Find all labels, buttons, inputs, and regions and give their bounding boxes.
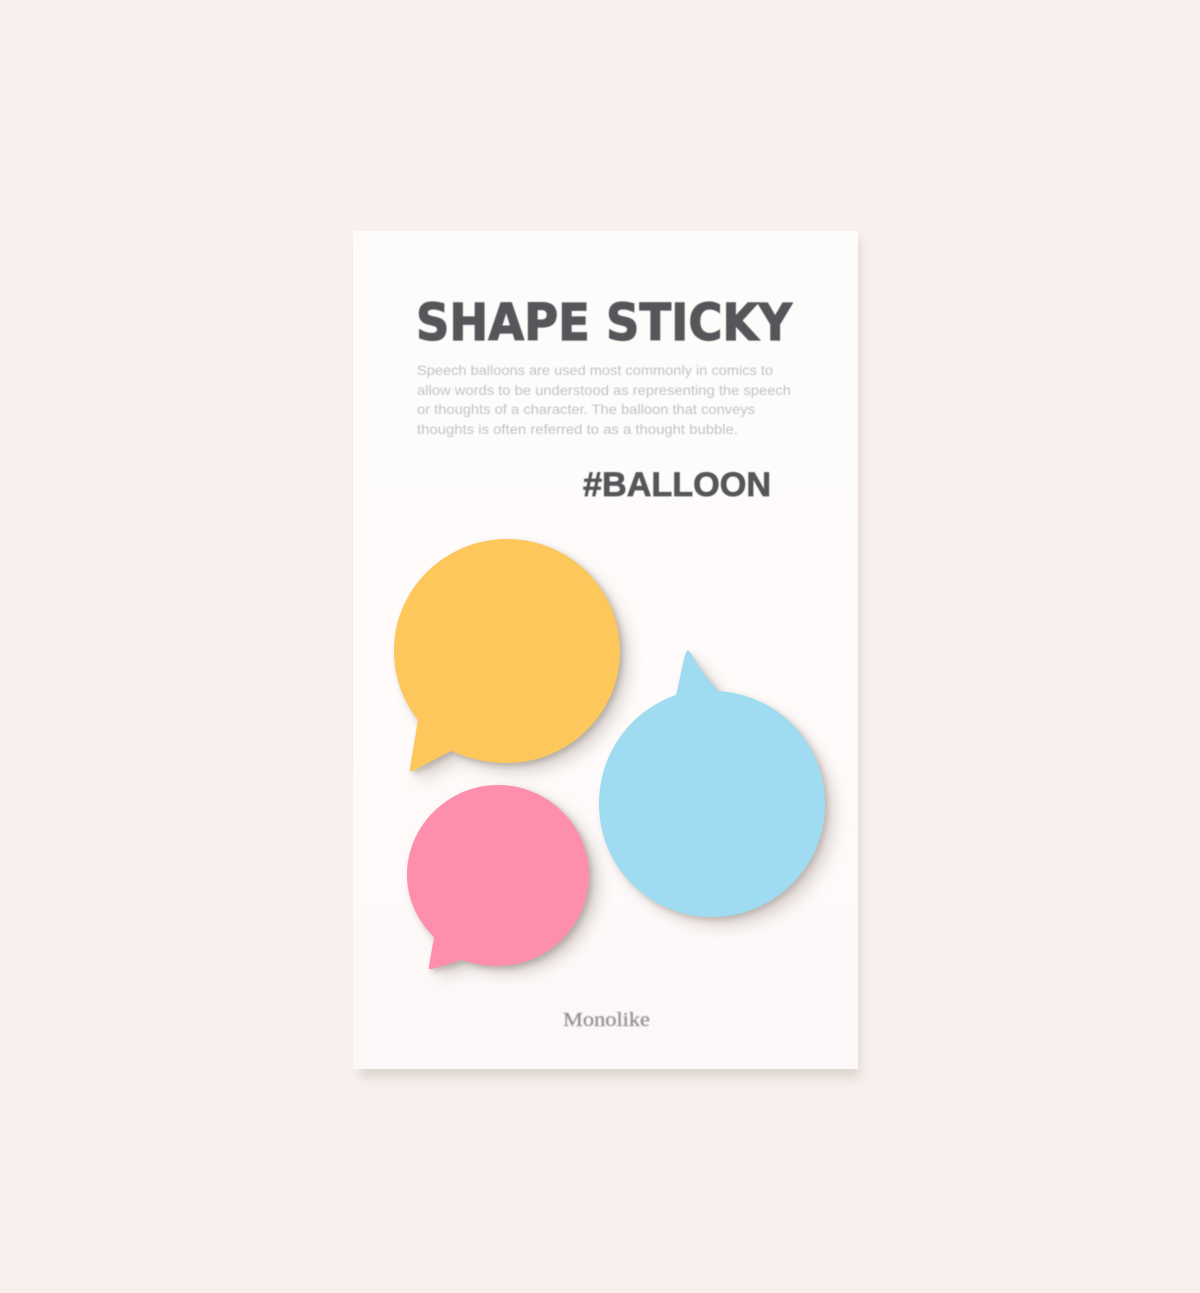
description text: allow words to be understood as representing the speech bbox=[417, 382, 791, 398]
description text: Speech balloons are used most commonly in comics to bbox=[417, 362, 773, 378]
description text: or thoughts of a character. The balloon that conveys bbox=[417, 401, 755, 417]
title: SHAPE STICKY bbox=[416, 294, 793, 353]
description text bbox=[417, 362, 791, 437]
pink speech balloon bbox=[407, 785, 599, 977]
blue speech balloon bbox=[599, 650, 835, 927]
description text: thoughts is often referred to as a thought bubble. bbox=[417, 421, 738, 437]
hashtag label: #BALLOON bbox=[583, 466, 771, 504]
yellow speech balloon bbox=[394, 539, 630, 782]
product card bbox=[353, 231, 860, 1078]
brand name: Monolike bbox=[563, 1009, 650, 1031]
